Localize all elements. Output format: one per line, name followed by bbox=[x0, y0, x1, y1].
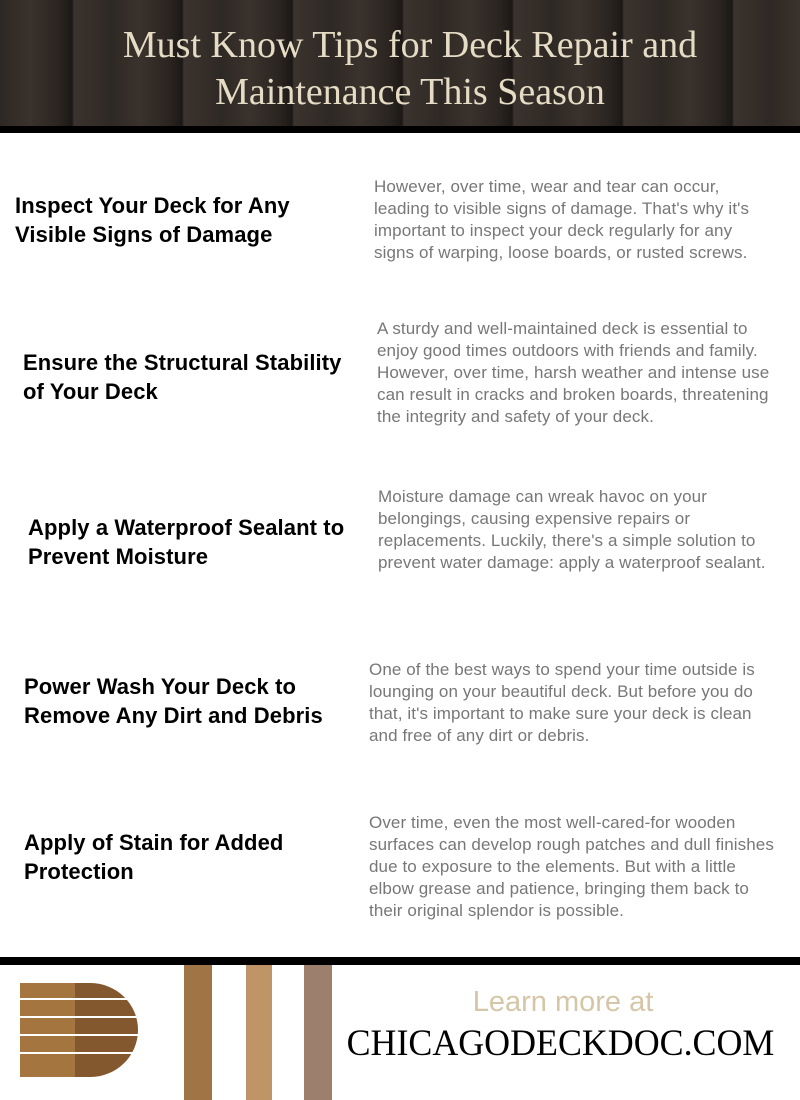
tip 4 text: and free of any dirt or debris. bbox=[369, 726, 589, 745]
tip 5 text: surfaces can develop rough patches and dull finishes bbox=[369, 835, 774, 854]
title: Maintenance This Season bbox=[215, 71, 605, 113]
tip 5 heading: Apply of Stain for Added bbox=[24, 830, 283, 855]
tip 1 text: signs of warping, loose boards, or rusted screws. bbox=[374, 243, 747, 262]
tip 3 text: replacements. Luckily, there's a simple solution to bbox=[378, 531, 755, 550]
tip 2 text bbox=[377, 319, 769, 426]
tip 3 text: prevent water damage: apply a waterproof sealant. bbox=[378, 553, 766, 572]
tip 2 heading: of Your Deck bbox=[23, 379, 158, 404]
tip 5 text: their original splendor is possible. bbox=[369, 901, 624, 920]
tip 4 text bbox=[369, 660, 755, 745]
tip 3 text bbox=[378, 487, 766, 572]
tip 3 text: Moisture damage can wreak havoc on your bbox=[378, 487, 707, 506]
tip 3 text: belongings, causing expensive repairs or bbox=[378, 509, 690, 528]
tip 5 text: due to exposure to the elements. But with a little bbox=[369, 857, 736, 876]
tip 3 heading: Apply a Waterproof Sealant to bbox=[28, 515, 344, 540]
tip 4 heading bbox=[24, 674, 323, 728]
logo: wooden D bbox=[20, 983, 138, 1077]
tip 4 heading: Remove Any Dirt and Debris bbox=[24, 703, 323, 728]
tip 3 heading bbox=[28, 515, 344, 569]
tip 4 text: that, it's important to make sure your deck is clean bbox=[369, 704, 752, 723]
tip 2 text: the integrity and safety of your deck. bbox=[377, 407, 654, 426]
stripes bbox=[184, 965, 212, 1100]
website: CHICAGODECKDOC.COM bbox=[347, 1023, 774, 1064]
tip 1 text: However, over time, wear and tear can occur, bbox=[374, 177, 720, 196]
tip 5 text bbox=[369, 813, 774, 920]
tip 3 heading: Prevent Moisture bbox=[28, 544, 208, 569]
tip 2 text: can result in cracks and broken boards, threatening bbox=[377, 385, 769, 404]
tip 2 text: enjoy good times outdoors with friends and family. bbox=[377, 341, 758, 360]
tip 1 heading: Inspect Your Deck for Any bbox=[15, 193, 290, 218]
title: Must Know Tips for Deck Repair and bbox=[123, 24, 697, 66]
tip 1 text: important to inspect your deck regularly for any bbox=[374, 221, 732, 240]
tip 4 text: lounging on your beautiful deck. But before you do bbox=[369, 682, 753, 701]
tip 5 heading: Protection bbox=[24, 859, 134, 884]
learn more: Learn more at bbox=[473, 986, 653, 1018]
tip 1 heading bbox=[15, 193, 290, 247]
tip 5 text: Over time, even the most well-cared-for wooden bbox=[369, 813, 735, 832]
tip 5 text: elbow grease and patience, bringing them back to bbox=[369, 879, 749, 898]
tip 2 heading: Ensure the Structural Stability bbox=[23, 350, 342, 375]
header banner bbox=[0, 0, 800, 126]
tip 5 heading bbox=[24, 830, 283, 884]
tip 1 heading: Visible Signs of Damage bbox=[15, 222, 272, 247]
tip 4 text: One of the best ways to spend your time outside is bbox=[369, 660, 755, 679]
tip 4 heading: Power Wash Your Deck to bbox=[24, 674, 296, 699]
tip 2 text: However, over time, harsh weather and intense use bbox=[377, 363, 769, 382]
tip 1 text: leading to visible signs of damage. That's why it's bbox=[374, 199, 749, 218]
tip 1 text bbox=[374, 177, 749, 262]
title bbox=[123, 24, 697, 113]
tip 2 heading bbox=[23, 350, 342, 404]
tip 2 text: A sturdy and well-maintained deck is essential to bbox=[377, 319, 748, 338]
